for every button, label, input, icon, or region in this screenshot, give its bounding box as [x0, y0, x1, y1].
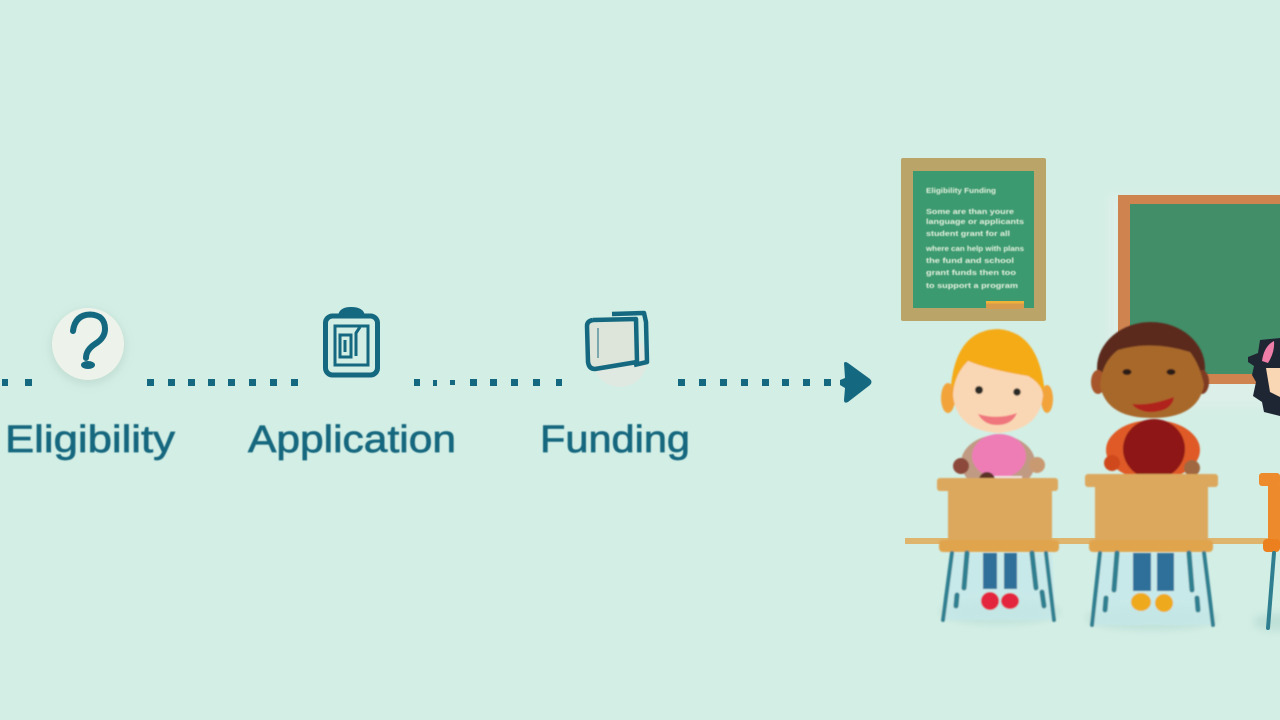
label: Funding: Funding	[540, 419, 690, 461]
process timeline	[2, 308, 872, 461]
connecting rail	[905, 538, 1280, 544]
face	[953, 361, 1043, 433]
hair	[1248, 338, 1280, 416]
label: Application: Application	[248, 419, 456, 461]
dotted arrow to classroom	[678, 362, 872, 403]
classroom scene	[901, 158, 1280, 631]
dotted connector: application to funding	[414, 379, 562, 386]
hair	[1097, 322, 1205, 414]
board text: Eligibility Funding	[926, 188, 996, 195]
student 2	[1085, 322, 1218, 630]
icon: funding folder	[587, 313, 647, 387]
face	[1100, 345, 1204, 418]
board text: grant funds then too	[926, 270, 1016, 277]
desk	[1085, 474, 1218, 487]
sweater	[1106, 420, 1200, 480]
chair leg	[1268, 553, 1274, 628]
dotted connector: eligibility left	[2, 379, 32, 386]
board text: student grant for all	[926, 231, 1010, 238]
label: Eligibility: Eligibility	[5, 419, 175, 461]
chair and legs	[942, 553, 1056, 620]
shadow	[1253, 613, 1280, 631]
hair bow	[1262, 341, 1274, 363]
board text: language or applicants	[926, 219, 1024, 226]
notice board	[901, 158, 1046, 321]
hair	[950, 329, 1045, 405]
desk	[937, 478, 1058, 491]
board text	[925, 188, 1024, 290]
shadow	[940, 600, 1060, 624]
shoes	[981, 592, 999, 610]
dotted connector: eligibility to application	[147, 379, 298, 386]
student 1	[937, 329, 1060, 624]
icon: question mark	[50, 308, 126, 385]
desk	[1259, 473, 1280, 486]
shoes	[1131, 593, 1151, 611]
board text: Some are than youre	[926, 209, 1014, 216]
icon: application clipboard	[326, 308, 378, 375]
blackboard	[1108, 195, 1280, 407]
board text: to support a program	[926, 283, 1018, 290]
shadow	[1086, 606, 1218, 630]
student 3	[1248, 338, 1280, 631]
chair and legs	[1092, 553, 1212, 625]
board text: where can help with plans	[925, 246, 1024, 253]
face	[1266, 368, 1280, 397]
board text: the fund and school	[926, 258, 1014, 265]
sweater	[961, 435, 1035, 491]
